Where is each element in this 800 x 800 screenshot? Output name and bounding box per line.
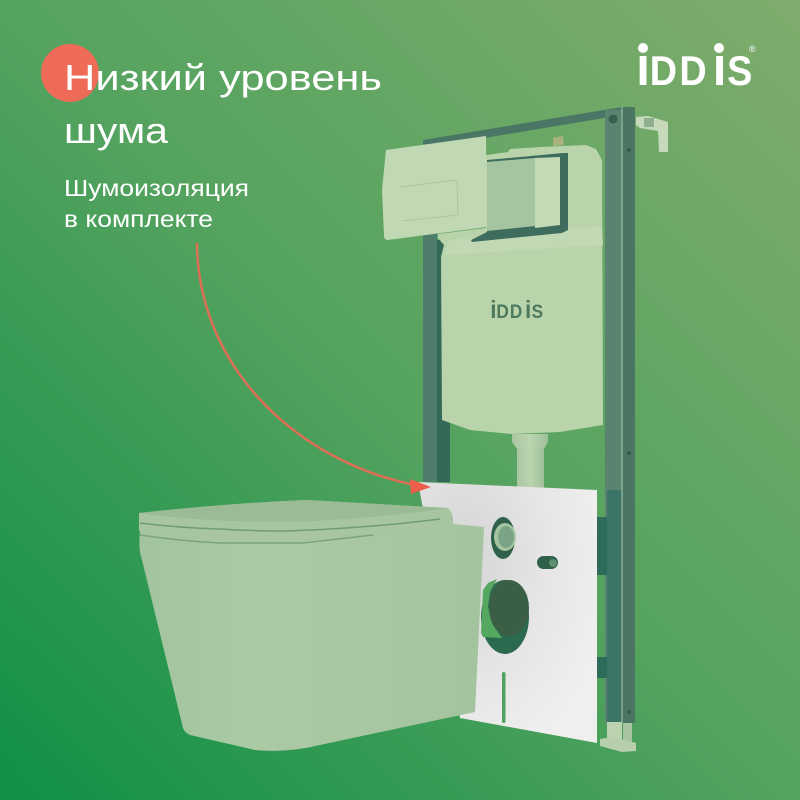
brand logo: i bbox=[636, 37, 650, 98]
drain pipe bbox=[512, 434, 548, 488]
tank logo: D bbox=[510, 300, 522, 322]
seat gaps bbox=[140, 519, 440, 543]
brand logo: D bbox=[650, 48, 677, 94]
brand logo: S bbox=[727, 48, 752, 94]
tank logo: i bbox=[490, 296, 496, 324]
tank logo: D bbox=[496, 300, 509, 322]
panel slot bbox=[502, 672, 506, 723]
flush plate bbox=[382, 136, 487, 240]
large drain opening bbox=[481, 579, 529, 654]
title: Низкий уровень bbox=[64, 57, 382, 98]
title bbox=[64, 57, 382, 151]
cistern tank bbox=[438, 136, 603, 434]
subtitle: Шумоизоляция bbox=[64, 175, 249, 201]
toilet seat bbox=[139, 500, 453, 544]
wall bracket bbox=[636, 116, 668, 152]
subtitle bbox=[64, 175, 249, 232]
tank logo: i bbox=[525, 296, 531, 324]
tank logo bbox=[490, 296, 543, 324]
brand logo: i bbox=[713, 37, 726, 98]
tank logo: S bbox=[532, 300, 543, 322]
brand logo bbox=[636, 37, 756, 98]
toilet bowl bbox=[139, 524, 484, 751]
upper pipe opening bbox=[491, 517, 516, 559]
cistern recess bbox=[471, 153, 568, 242]
brand logo: D bbox=[679, 48, 707, 94]
coral accent circle bbox=[41, 44, 99, 102]
toilet lid top bbox=[139, 500, 448, 522]
subtitle: в комплекте bbox=[64, 206, 213, 232]
feet bbox=[600, 722, 636, 752]
title: шума bbox=[64, 110, 169, 151]
brand logo: ® bbox=[749, 44, 756, 54]
white soundproofing panel bbox=[418, 482, 597, 743]
orange arrow bbox=[197, 243, 431, 494]
wall-hung toilet bbox=[139, 500, 484, 751]
installation frame bbox=[423, 107, 635, 723]
small pipe opening bbox=[537, 556, 558, 569]
